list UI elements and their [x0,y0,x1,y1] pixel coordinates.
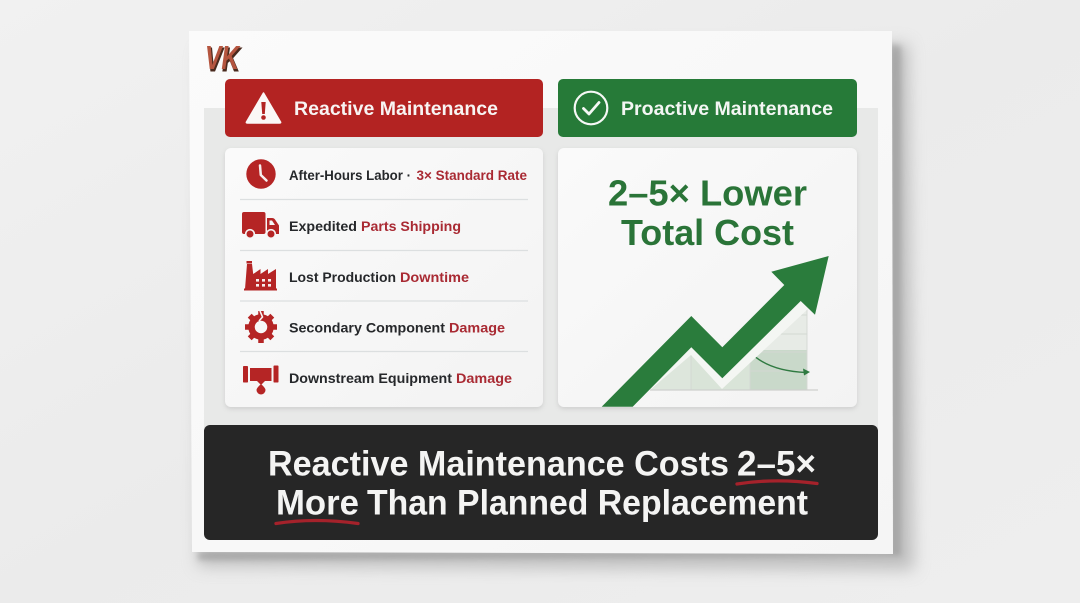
grey content panel [204,108,878,428]
text: downstream equipment damage: Downstream Equipment [289,371,452,387]
icon: check circle [575,92,607,124]
row: expedited parts shipping [242,212,461,238]
arrow: rising trend [602,256,829,407]
panel: proactive result [558,148,857,409]
row: downstream equipment damage: Damage [456,371,512,387]
underline: 2-5x [737,481,817,484]
chart: cost comparison [650,303,818,390]
banner: bottom takeaway [204,425,878,540]
banner: bottom takeaway: Than Planned Replacement [367,482,808,522]
row: lost production downtime [244,261,469,290]
heading: lower total cost: Total Cost [621,212,794,253]
icon: warning triangle [246,93,281,123]
row: lost production downtime: Downtime [400,270,469,286]
icon: cracked gear [245,311,277,343]
icon: truck [242,212,279,238]
heading: proactive maintenance: Proactive Maintenance [621,98,833,120]
panel: reactive cost list [225,148,543,409]
banner: bottom takeaway: 2–5× [737,444,816,484]
logo: VK: VK [205,39,241,76]
text: expedited parts shipping: Expedited [289,219,357,235]
text: after-hours labor: After-Hours Labor · [289,168,411,184]
text: lost production downtime: Lost Production [289,270,396,286]
banner: bottom takeaway: More [276,482,359,522]
row: secondary component damage: Damage [449,320,505,336]
banner: bottom takeaway: Reactive Maintenance Costs [268,444,729,484]
underline: more [276,520,358,524]
panel: reactive header [225,79,543,137]
panel: proactive header [558,79,857,137]
text: secondary component damage: Secondary Component [289,320,445,336]
row: downstream equipment damage [243,366,512,394]
heading: lower total cost: 2–5× Lower [608,172,807,214]
heading: reactive maintenance: Reactive Maintenance [294,98,498,120]
icon: factory [244,261,277,290]
row: expedited parts shipping: Parts Shipping [361,219,461,235]
row: secondary component damage [245,311,505,343]
icon: leaking pipe [243,366,278,394]
paper sheet [189,31,914,570]
row: after-hours labor [246,159,527,189]
logo: VK: VK [206,41,242,78]
heading: lower total cost [608,172,807,253]
icon: clock [246,159,276,189]
row: after-hours labor: 3× Standard Rate [416,168,527,184]
